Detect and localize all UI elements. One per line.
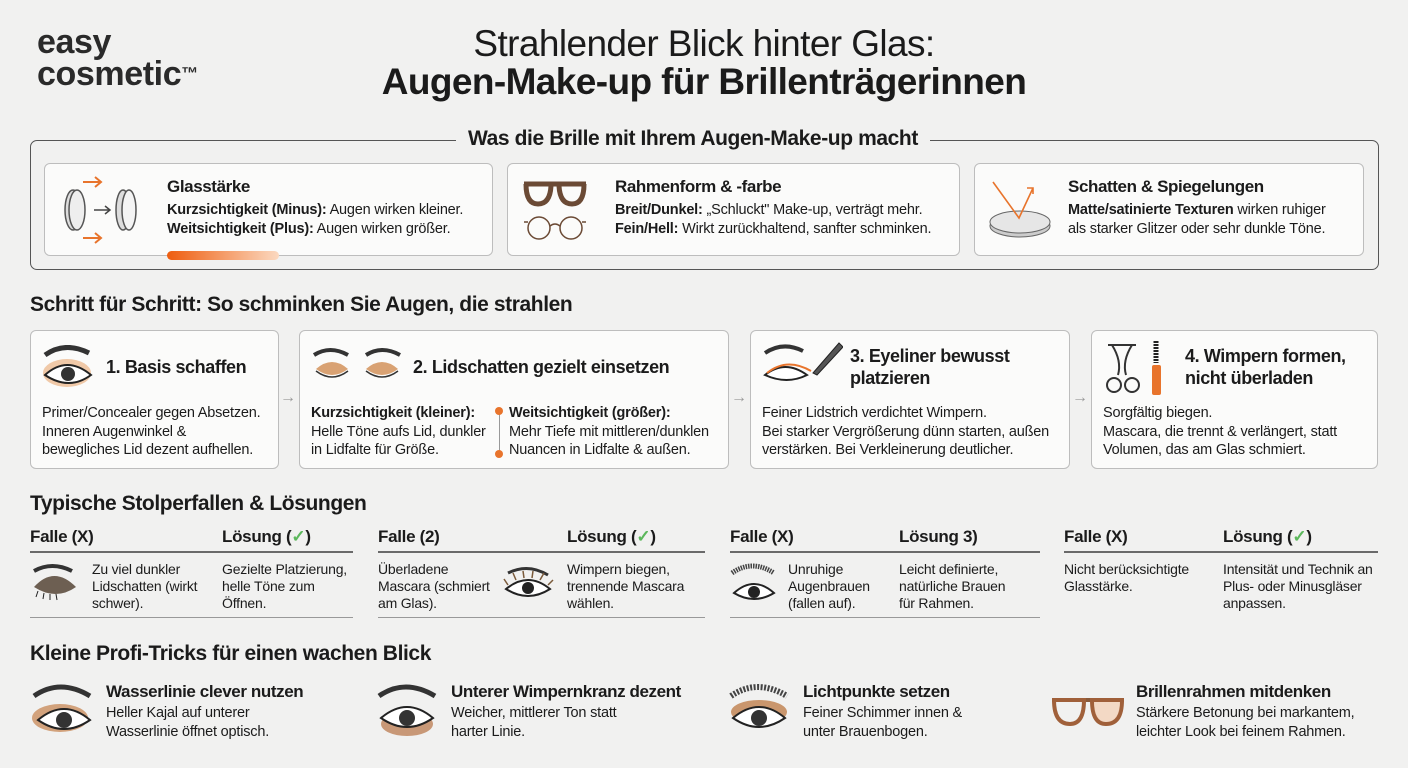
text: Volumen, das am Glas schmiert. [1103,442,1306,458]
pitfall group 3: Augenbrauen [788,578,870,594]
text right: Mehr Tiefe mit mittleren/dunklen [509,424,709,440]
pitfall group 1: Falle (X) [30,527,93,546]
trick 1: Wasserlinie clever nutzen [106,682,303,701]
text right: Weitsichtigkeit (größer): [509,405,670,421]
pitfall group 4 [1064,527,1378,611]
text left [311,405,486,458]
icon: shimmer eye [729,684,788,728]
card: Rahmenform [507,163,960,256]
icon: frames [524,182,586,240]
panel: glasses effects [30,140,1379,270]
pitfall group 3: für Rahmen. [899,595,974,611]
text [42,405,260,458]
icon: lashes eye [503,567,554,597]
pitfall group 3: Falle (X) [730,527,793,546]
pitfall group 2: Falle (2) [378,527,440,546]
pitfall group 3 [730,527,1040,618]
title: 4. Wimpern formen, [1185,346,1346,366]
pitfall group 1: Gezielte Platzierung, [222,561,347,577]
panel heading: Was die Brille mit Ihrem Augen-Make-up macht [468,127,918,150]
text: Sorgfältig biegen. [1103,405,1212,421]
title: nicht überladen [1185,368,1313,388]
pitfall group 1: Zu viel dunkler [92,561,180,577]
step 2 [299,330,729,469]
icon: reflection [990,182,1050,238]
icon: eye waterline [32,684,92,732]
trick 3: Lichtpunkte setzen [803,682,950,701]
text: Rahmenform & -farbe [615,177,781,196]
card: Glasstärke [44,163,493,256]
trick 4: Brillenrahmen mitdenken [1136,682,1331,701]
pitfall group 1 [30,527,353,618]
pitfall group 2: trennende Mascara [567,578,684,594]
pitfall group 2 [378,527,705,618]
divider dots [499,408,506,456]
pitfall group 3: (fallen auf). [788,595,855,611]
text: Schatten & Spiegelungen [1068,177,1264,196]
icon: lenses [64,176,137,244]
pitfall group 3: Leicht definierte, [899,561,998,577]
pitfall group 1: schwer). [92,595,143,611]
icon: eyes closed [313,348,401,378]
text right: Nuancen in Lidfalte & außen. [509,442,690,458]
title [382,23,1026,102]
text: Matte/satinierte Texturen wirken ruhiger [1068,202,1326,218]
logo: cosmetic™ [37,55,198,93]
text [762,405,1049,458]
pitfall group 3: Lösung 3) [899,527,978,546]
arrow: → [1072,389,1088,406]
heading: pitfalls: Typische Stolperfallen & Lösungen [30,492,366,515]
card: Schatten [974,163,1364,256]
trick 2: Weicher, mittlerer Ton statt [451,705,617,721]
text: bewegliches Lid dezent aufhellen. [42,442,253,458]
trick 3: Feiner Schimmer innen & [803,705,962,721]
logo: easy [37,23,111,61]
logo [37,23,198,93]
trick 1: Heller Kajal auf unterer [106,705,250,721]
pitfall group 4: Plus- oder Minusgläser [1223,578,1362,594]
text left: in Lidfalte für Größe. [311,442,439,458]
icon: brows eye [730,564,776,600]
pitfall group 1: helle Töne zum [222,578,315,594]
pitfall group 2: am Glas). [378,595,437,611]
accent bar [167,251,279,260]
pitfall group 4: anpassen. [1223,595,1286,611]
text left: Kurzsichtigkeit (kleiner): [311,405,475,421]
trick 4 [1052,682,1354,740]
icon: eyeliner [763,342,843,381]
text: Kurzsichtigkeit (Minus): Augen wirken kleiner. [167,202,463,218]
pitfall group 1: Lösung (✓) [222,527,311,546]
text: Primer/Concealer gegen Absetzen. [42,405,260,421]
trick 4: Stärkere Betonung bei markantem, [1136,705,1354,721]
trick 2 [378,682,682,740]
icon: curler and mascara [1106,341,1161,395]
text: Bei starker Vergrößerung dünn starten, außen [762,424,1049,440]
pitfall group 4: Falle (X) [1064,527,1127,546]
text [167,177,463,236]
step 3 [750,330,1070,469]
title [850,346,1010,388]
text: verstärken. Bei Verkleinerung deutlicher. [762,442,1013,458]
icon: eye [43,345,92,387]
pitfall group 2: wählen. [567,595,614,611]
heading: tricks: Kleine Profi-Tricks für einen wachen Blick [30,642,431,665]
pitfall group 4: Intensität und Technik an [1223,561,1373,577]
text: Mascara, die trennt & verlängert, statt [1103,424,1337,440]
pitfall group 2: Lösung (✓) [567,527,656,546]
title [1185,346,1346,388]
pitfall group 2: Überladene [378,561,448,577]
arrow: → [731,389,747,406]
title: Augen-Make-up für Brillenträgerinnen [382,61,1026,102]
text: Breit/Dunkel: „Schluckt" Make-up, verträgt mehr. [615,202,922,218]
icon: dark eye [33,564,76,600]
pitfall group 3: natürliche Brauen [899,578,1005,594]
pitfall group 1: Öffnen. [222,595,266,611]
title: platzieren [850,368,930,388]
title: 1. Basis schaffen [106,357,246,377]
pitfall group 4: Lösung (✓) [1223,527,1312,546]
text: Inneren Augenwinkel & [42,424,186,440]
pitfall group 1: Lidschatten (wirkt [92,578,197,594]
arrow: → [280,389,296,406]
text left: Helle Töne aufs Lid, dunkler [311,424,486,440]
pitfall group 2: Mascara (schmiert [378,578,490,594]
pitfall group 3: Unruhige [788,561,843,577]
text: Feiner Lidstrich verdichtet Wimpern. [762,405,987,421]
pitfall group 4: Glasstärke. [1064,578,1133,594]
icon: eye lower lashes [378,684,436,736]
trick 4: leichter Look bei feinem Rahmen. [1136,724,1346,740]
icon: frame [1052,698,1124,726]
trick 1: Wasserlinie öffnet optisch. [106,724,269,740]
text: Glasstärke [167,177,250,196]
trick 3: unter Brauenbogen. [803,724,928,740]
title: 2. Lidschatten gezielt einsetzen [413,357,669,377]
text: Fein/Hell: Wirkt zurückhaltend, sanfter schminken. [615,220,931,236]
text [1103,405,1338,458]
trick 1 [32,682,303,740]
title: 3. Eyeliner bewusst [850,346,1009,366]
trick 2: harter Linie. [451,724,525,740]
text: Weitsichtigkeit (Plus): Augen wirken größer. [167,220,450,236]
title: Strahlender Blick hinter Glas: [473,23,935,64]
text [1068,177,1326,236]
pitfall group 4: Nicht berücksichtigte [1064,561,1189,577]
step 1 [30,330,279,469]
trick 3 [729,682,962,740]
heading: steps: Schritt für Schritt: So schminken Sie Augen, die strahlen [30,293,572,316]
trick 2: Unterer Wimpernkranz dezent [451,682,681,701]
text right [509,405,709,458]
text [615,177,931,236]
pitfall group 2: Wimpern biegen, [567,561,670,577]
text: als starker Glitzer oder sehr dunkle Töne. [1068,220,1325,236]
step 4 [1091,330,1378,469]
